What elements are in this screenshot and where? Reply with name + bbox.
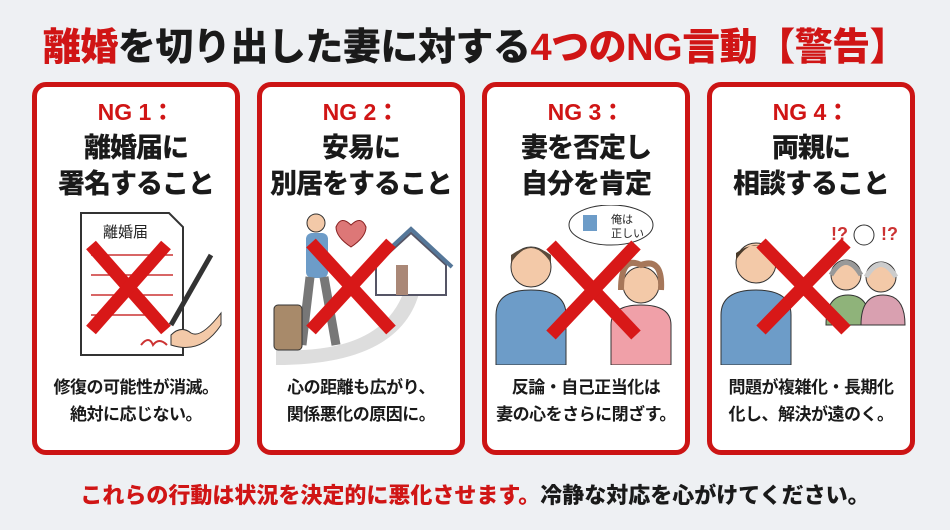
icon: red X bbox=[91, 245, 166, 330]
icon: red X bbox=[311, 243, 391, 330]
illustration: leaving home bbox=[274, 214, 454, 365]
text: NG2 title bbox=[270, 133, 452, 199]
text: NG4 title bbox=[733, 133, 889, 199]
text: NG3 title bbox=[521, 133, 652, 199]
text: NG3 title: 妻を否定し bbox=[521, 133, 651, 163]
caption: NG4: 化し、解決が遠のく。 bbox=[728, 405, 894, 424]
caption: NG3: 妻の心をさらに閉ざす。 bbox=[496, 405, 676, 424]
illustration: phone to parents: !? bbox=[881, 224, 898, 244]
illustration: arguing couple: 俺は bbox=[611, 211, 633, 227]
illustration: arguing couple: 正しい bbox=[611, 225, 644, 241]
icon: red X bbox=[551, 245, 636, 335]
footer message: これらの行動は状況を決定的に悪化させます。冷静な対応を心がけてください。 bbox=[80, 483, 870, 508]
caption: NG3: 反論・自己正当化は bbox=[512, 378, 660, 397]
text: NG1 title: 署名すること bbox=[58, 169, 214, 199]
text: NG1 title: 離婚届に bbox=[84, 133, 188, 163]
text: NG2 title: 別居をすること bbox=[270, 169, 452, 199]
caption: NG2: 心の距離も広がり、 bbox=[287, 378, 435, 397]
illustration: divorce paper: 離婚届 bbox=[103, 221, 148, 242]
text: NG4 title: 相談すること bbox=[733, 169, 889, 199]
illustration: phone to parents: !? bbox=[831, 224, 848, 244]
heading: NG3: NG 3： bbox=[548, 99, 624, 125]
caption: NG1: 修復の可能性が消滅。 bbox=[54, 378, 218, 397]
heading: NG1: NG 1： bbox=[98, 99, 174, 125]
caption: NG4 bbox=[728, 378, 894, 424]
icon: red X bbox=[761, 243, 846, 330]
panel: NG1 bbox=[32, 82, 240, 455]
text: NG4 title: 両親に bbox=[772, 133, 850, 163]
caption: NG1 bbox=[54, 378, 218, 424]
heading: NG4: NG 4： bbox=[773, 99, 849, 125]
panel: NG4 bbox=[707, 82, 915, 455]
illustration: divorce paper bbox=[80, 212, 222, 356]
panel: NG2 bbox=[257, 82, 465, 455]
caption: NG3 bbox=[496, 378, 676, 424]
text: NG1 title bbox=[58, 133, 214, 199]
title: 離婚を切り出した妻に対する4つのNG言動【警告】 bbox=[43, 27, 907, 69]
caption: NG1: 絶対に応じない。 bbox=[70, 405, 202, 424]
text: NG2 title: 安易に bbox=[322, 133, 400, 163]
caption: NG2 bbox=[287, 378, 435, 424]
heading: NG2: NG 2： bbox=[323, 99, 399, 125]
panel: NG3 bbox=[482, 82, 690, 455]
illustration: phone to parents bbox=[720, 224, 906, 365]
illustration: arguing couple bbox=[496, 205, 672, 365]
caption: NG4: 問題が複雑化・長期化 bbox=[728, 378, 894, 397]
text: NG3 title: 自分を肯定 bbox=[521, 169, 651, 199]
caption: NG2: 関係悪化の原因に。 bbox=[287, 405, 435, 424]
